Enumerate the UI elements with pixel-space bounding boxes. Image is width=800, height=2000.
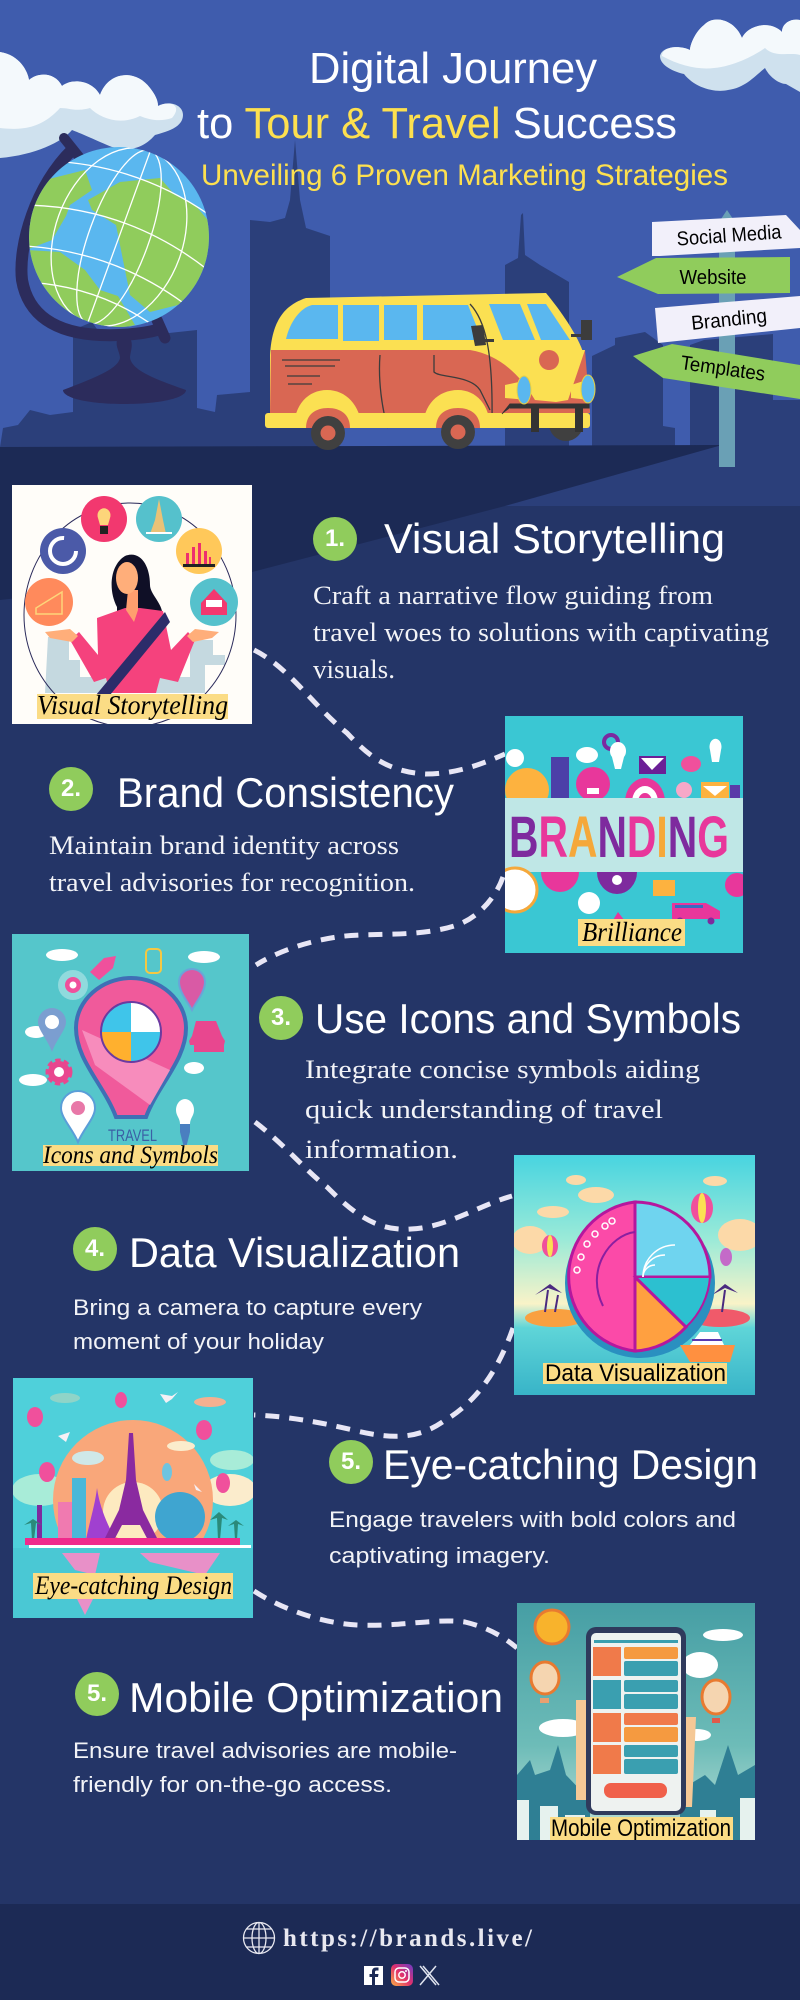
sign: Branding: Branding	[690, 305, 768, 335]
heading 1: Visual Storytelling	[384, 515, 725, 562]
road	[0, 445, 722, 600]
van bumper	[265, 413, 590, 428]
sign: Templates: Templates	[679, 352, 766, 386]
description 3: quick understanding of travel	[305, 1095, 663, 1124]
sign: Templates	[633, 344, 800, 399]
image caption: Eye-catching Design	[34, 1571, 232, 1600]
BRANDING wordmark: BRANDING	[509, 805, 729, 870]
signpost pole	[719, 210, 735, 467]
description 2: travel advisories for recognition.	[49, 868, 415, 897]
van door lines	[282, 304, 492, 428]
icon: signpost	[617, 210, 800, 467]
Eiffel tower	[102, 1433, 160, 1544]
description 4	[73, 1295, 422, 1354]
description 4: Bring a camera to capture every	[73, 1295, 422, 1320]
connector: 1 to 2	[254, 650, 505, 774]
globe sphere	[29, 147, 209, 327]
van front wheel	[549, 407, 583, 441]
panel: city skyline silhouette	[0, 140, 800, 447]
rocket and luggage	[90, 949, 161, 980]
sign: Branding	[655, 296, 800, 343]
panel: Mobile Optimization illustration	[517, 1603, 755, 1842]
sun disc	[53, 1420, 213, 1580]
target pins	[38, 969, 205, 1142]
heading 4: Data Visualization	[129, 1229, 460, 1276]
background: header sky	[0, 0, 800, 510]
banner band	[505, 798, 743, 872]
description 4: moment of your holiday	[73, 1329, 324, 1354]
heading 5: Eye-catching Design	[383, 1441, 758, 1488]
palms	[24, 1512, 244, 1540]
connector: 2 to 3	[256, 877, 503, 965]
description 5: Engage travelers with bold colors and	[329, 1507, 736, 1532]
body background	[0, 506, 800, 1906]
sign: Website: Website	[680, 267, 746, 289]
badge 6: 5.	[87, 1680, 107, 1707]
heading 6: Mobile Optimization	[129, 1674, 503, 1721]
badge 5	[329, 1440, 373, 1484]
icon: web globe	[243, 1922, 275, 1954]
description 1: visuals.	[313, 655, 395, 684]
van body upper	[270, 293, 590, 413]
sun	[535, 1610, 569, 1644]
panel: section 3 text	[259, 995, 741, 1164]
panel: section 1 text	[313, 515, 769, 684]
van windows	[286, 304, 570, 341]
ground	[25, 1538, 240, 1545]
sky details	[58, 1392, 202, 1492]
car	[189, 1021, 225, 1052]
van headlights	[505, 380, 528, 400]
sign: Website	[617, 257, 790, 294]
boat	[680, 1332, 735, 1362]
van wheels	[311, 416, 345, 450]
sign: Social Media	[652, 215, 800, 256]
icon: facebook	[364, 1966, 383, 1985]
globe stand arc	[21, 150, 163, 335]
title: Digital Journey	[309, 44, 597, 93]
icon: camper van	[265, 293, 595, 450]
panel: Visual Storytelling illustration	[12, 485, 252, 724]
balloons	[542, 1193, 732, 1266]
description 5	[329, 1507, 736, 1568]
city highlights	[517, 1798, 755, 1840]
badge 5: 5.	[341, 1448, 361, 1475]
pie chart	[565, 1202, 715, 1358]
badge 2	[49, 767, 93, 811]
description 3	[305, 1055, 700, 1164]
city	[517, 1745, 755, 1840]
heading 3: Use Icons and Symbols	[315, 995, 741, 1042]
description 6: Ensure travel advisories are mobile-	[73, 1738, 457, 1763]
bottom decorations	[493, 868, 749, 925]
description 5: captivating imagery.	[329, 1543, 550, 1568]
description 1: Craft a narrative flow guiding from	[313, 581, 713, 610]
image caption: Brilliance	[582, 917, 682, 947]
sign: Social Media: Social Media	[676, 221, 783, 251]
van emblem	[539, 350, 559, 370]
badge 3: 3.	[271, 1004, 291, 1031]
icon: X	[420, 1966, 439, 1985]
panel: footer	[0, 1904, 800, 2000]
balloons	[27, 1392, 230, 1493]
islands and palms	[525, 1284, 750, 1327]
badge 3	[259, 996, 303, 1040]
city backdrop	[45, 637, 225, 693]
icon circles	[25, 496, 238, 626]
clouds	[539, 1629, 743, 1741]
description 1: travel woes to solutions with captivating	[313, 618, 769, 647]
woman figure	[45, 555, 219, 695]
description 2: Maintain brand identity across	[49, 831, 399, 860]
panel: section 2 text	[49, 767, 454, 897]
pink map	[62, 1553, 220, 1615]
title	[197, 44, 677, 148]
badge 6	[75, 1672, 119, 1716]
clouds	[512, 1175, 762, 1254]
connector: 3 to 4	[255, 1122, 512, 1229]
panel: section 6 text	[73, 1672, 503, 1797]
image caption: Data Visualization	[545, 1360, 726, 1387]
van mirrors	[471, 325, 486, 346]
cloud: left	[0, 52, 183, 158]
orbit ring	[24, 503, 236, 727]
heading 2: Brand Consistency	[117, 769, 454, 816]
phone	[586, 1627, 686, 1815]
top decorations	[505, 735, 740, 826]
icon: instagram	[391, 1964, 413, 1986]
hand	[576, 1700, 696, 1807]
towers	[37, 1478, 118, 1544]
balloons	[531, 1662, 730, 1723]
panel: Icons and Symbols illustration	[12, 934, 249, 1171]
cloud: right	[660, 19, 800, 92]
badge 2: 2.	[61, 775, 81, 802]
clouds	[19, 949, 220, 1086]
image caption: Icons and Symbols	[42, 1142, 218, 1169]
image caption: Visual Storytelling	[37, 690, 228, 720]
connector: 5 to 6	[254, 1591, 517, 1648]
description 3: Integrate concise symbols aiding	[305, 1055, 700, 1084]
van front bar	[502, 404, 589, 414]
clouds	[12, 1393, 256, 1506]
icon: globe on stand	[15, 133, 209, 404]
badge 1	[313, 517, 357, 561]
badge 4: 4.	[85, 1235, 105, 1262]
big pin	[76, 978, 186, 1117]
bulb	[176, 1099, 194, 1152]
globe dome	[155, 1492, 205, 1542]
globe stand base	[63, 338, 186, 404]
panel: Branding illustration	[505, 716, 743, 953]
connector: 4 to 5	[254, 1328, 513, 1436]
panel: Eye-catching Design illustration	[13, 1378, 253, 1618]
van body lower	[270, 350, 590, 413]
description 2	[49, 831, 415, 897]
puzzle circle	[101, 1002, 131, 1032]
title: to Tour & Travel Success	[197, 99, 677, 148]
band below horizon	[0, 447, 800, 507]
panel: section 5 text	[329, 1440, 758, 1568]
phone rows	[593, 1647, 678, 1774]
description 3: information.	[305, 1135, 458, 1164]
panel: section 4 text	[73, 1227, 460, 1354]
gear	[48, 1061, 70, 1083]
subtitle: Unveiling 6 Proven Marketing Strategies	[201, 159, 728, 192]
van wheel arches	[294, 390, 362, 428]
description 6	[73, 1738, 457, 1797]
badge 4	[73, 1227, 117, 1271]
description 6: friendly for on-the-go access.	[73, 1772, 392, 1797]
badge 1: 1.	[325, 525, 345, 552]
panel: Data Visualization illustration	[514, 1155, 755, 1395]
website url: https://brands.live/	[283, 1925, 533, 1952]
description 1	[313, 581, 769, 684]
TRAVEL label: TRAVEL	[108, 1126, 157, 1145]
